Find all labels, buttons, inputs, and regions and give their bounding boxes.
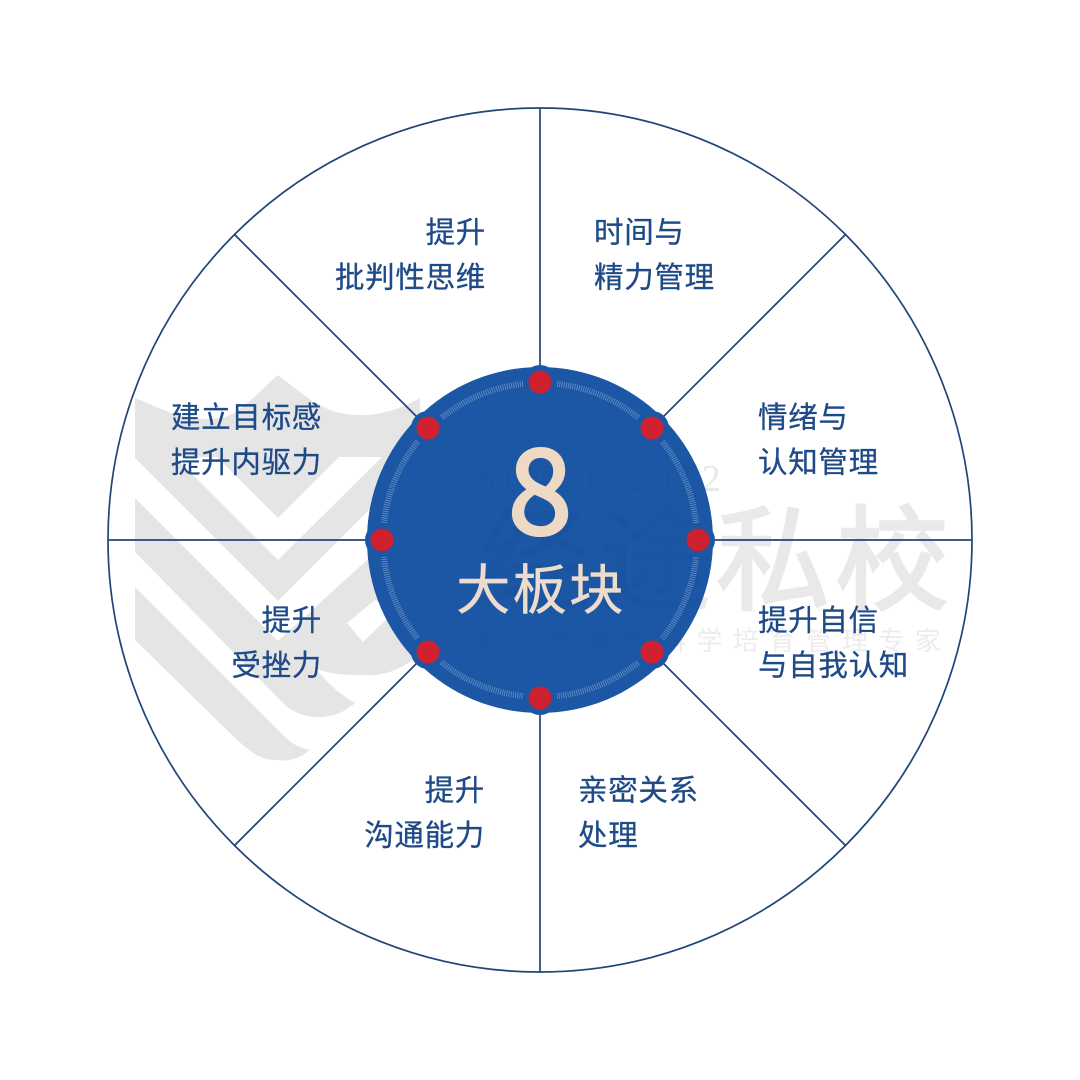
label: goals and motivation: 建立目标感 bbox=[171, 402, 322, 434]
centre caption: 大板块 bbox=[456, 561, 626, 621]
faint watermark over disc: 经途私校 bbox=[478, 499, 954, 626]
label: resilience: 受挫力 bbox=[231, 650, 322, 682]
label: emotion and cognition: 认知管理 bbox=[758, 446, 879, 480]
watermark logo: chevron shield bbox=[135, 375, 425, 761]
label: time and energy: 精力管理 bbox=[594, 262, 715, 294]
centre number: 8 bbox=[508, 402, 572, 568]
faint watermark over disc: 新一代青年科学培育管理专家 bbox=[478, 626, 951, 656]
faint watermark over disc: SINCE 2012 bbox=[476, 458, 726, 500]
watermark: brand logo and name bbox=[135, 375, 954, 761]
label: self-confidence: 提升自信 bbox=[758, 604, 879, 638]
watermark: since 2012: SINCE 2012 bbox=[476, 458, 726, 500]
label: communication: 沟通能力 bbox=[364, 820, 485, 852]
label: resilience: 提升 bbox=[262, 604, 322, 638]
label: emotion and cognition: 情绪与 bbox=[758, 402, 849, 434]
faint watermark over disc bbox=[476, 458, 954, 656]
wheel: sector dividers bbox=[108, 108, 972, 972]
watermark: brand name: 经途私校 bbox=[478, 499, 954, 626]
watermark: tagline: 新一代青年科学培育管理专家 bbox=[478, 626, 951, 656]
label: critical thinking: 批判性思维 bbox=[335, 262, 486, 294]
centre disc bbox=[365, 365, 715, 715]
label: intimate relationships: 处理 bbox=[578, 820, 638, 852]
tick ring gaps bbox=[365, 365, 715, 715]
tick ring bbox=[383, 383, 697, 697]
label: communication: 提升 bbox=[425, 774, 485, 808]
label: goals and motivation: 提升内驱力 bbox=[171, 446, 322, 480]
label: self-confidence: 与自我认知 bbox=[758, 650, 909, 682]
label: critical thinking: 提升 bbox=[426, 216, 486, 250]
label: intimate relationships: 亲密关系 bbox=[578, 774, 699, 808]
wheel: outer ring bbox=[108, 108, 972, 972]
red marker dots bbox=[370, 370, 710, 710]
label: time and energy: 时间与 bbox=[594, 216, 685, 250]
